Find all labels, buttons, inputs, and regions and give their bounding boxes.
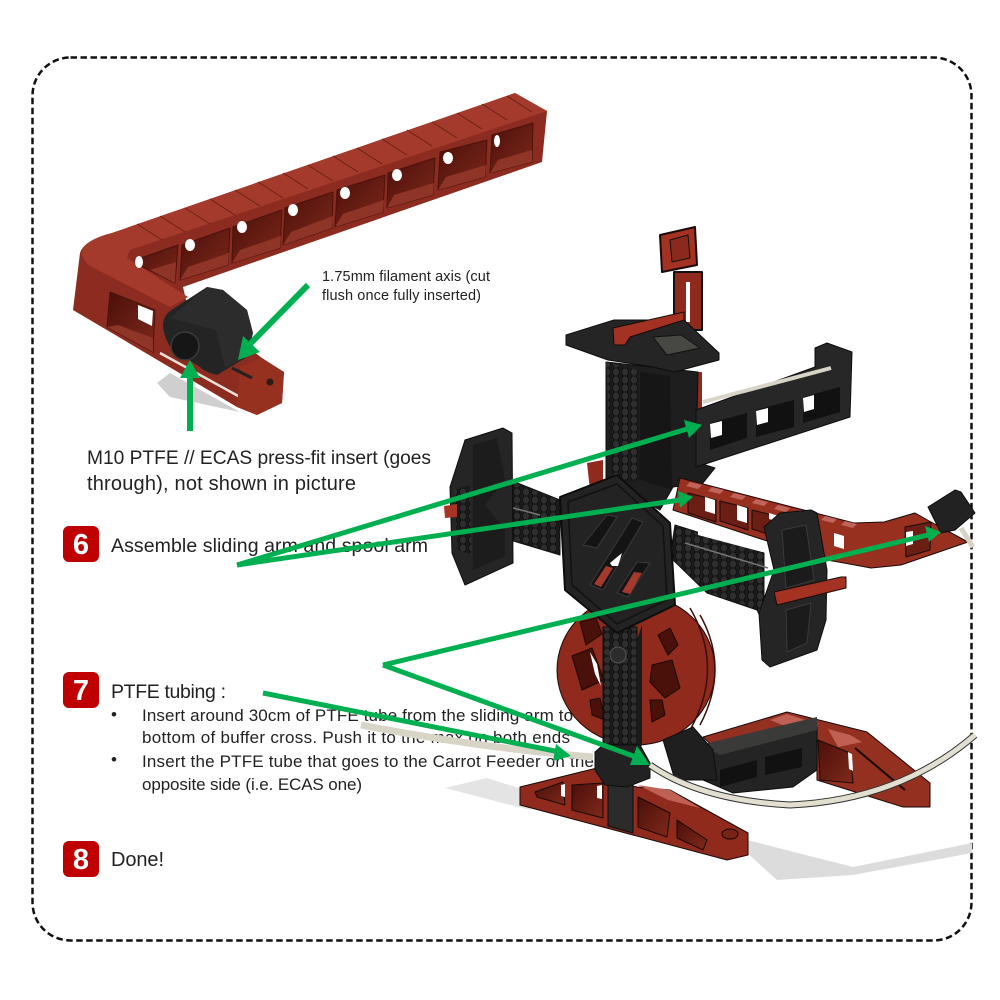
red sliding arm in machine — [673, 478, 968, 568]
upper right black arm — [696, 343, 852, 467]
arrow: spool arm — [237, 491, 693, 565]
ground shadow — [747, 840, 972, 880]
left black disc — [450, 428, 513, 585]
gap below red arm — [698, 527, 762, 552]
step 7 bullets: Insert around 30cm of PTFE tube from the sliding arm to the — [142, 706, 602, 725]
PTFE tube main curve — [650, 735, 975, 805]
insert label: M10 PTFE // ECAS press-fit insert (goes — [87, 448, 431, 469]
left red clip — [444, 504, 457, 518]
left spool arm — [510, 480, 560, 555]
right red clip — [774, 577, 846, 605]
rear strut — [663, 727, 717, 780]
arrow: insert — [180, 360, 200, 431]
step 7 bullets — [111, 705, 602, 794]
PTFE tube left section — [361, 725, 593, 757]
step 6 badge — [63, 526, 99, 562]
step 7 bullets: opposite side (i.e. ECAS one) — [142, 775, 362, 794]
window floors — [107, 150, 532, 352]
arrow: filament axis — [238, 285, 308, 360]
base foot — [520, 768, 748, 860]
filament axis label: flush once fully inserted) — [322, 288, 481, 304]
lower cross column — [603, 627, 637, 753]
right black disc — [759, 510, 827, 667]
step 7 bullets: • — [111, 750, 117, 769]
column base block — [595, 745, 650, 787]
cross top cap — [566, 320, 719, 372]
hexagon hub — [560, 475, 675, 633]
step 8 badge — [63, 841, 99, 877]
step 7 badge — [63, 672, 99, 708]
arrow: tube insertion — [263, 693, 571, 761]
left ground shadow — [445, 778, 530, 810]
arrow: tube at sliding arm end — [383, 526, 941, 665]
sliding arm render — [73, 93, 547, 415]
filament axis label: 1.75mm filament axis (cut — [322, 269, 490, 285]
ribs — [137, 96, 532, 240]
red cap clip — [613, 312, 684, 345]
filament axis label — [322, 269, 490, 304]
red stem and flag — [660, 227, 702, 412]
PTFE tube at nut — [961, 528, 973, 547]
arm body — [73, 93, 547, 415]
arm shadow — [157, 373, 240, 412]
step 6 badge: 6 — [73, 529, 89, 561]
rear red frame — [703, 712, 930, 807]
right insert nut — [928, 490, 975, 533]
step 6 text: Assemble sliding arm and spool arm — [111, 535, 428, 557]
arrow: sliding arm — [237, 420, 702, 565]
step 7 bullets: Insert the PTFE tube that goes to the Carrot Feeder on the — [142, 752, 594, 771]
arm windows — [107, 123, 533, 352]
black insert nut — [163, 287, 253, 375]
insert label — [87, 448, 431, 495]
step 8 text: Done! — [111, 849, 164, 871]
right spool arm — [670, 525, 764, 625]
red bit behind column — [587, 460, 603, 490]
step 7 heading: PTFE tubing : — [111, 681, 226, 703]
step 7 badge: 7 — [73, 675, 89, 707]
cylinder groove — [160, 353, 240, 397]
spool wheel — [557, 595, 715, 745]
arm top surface — [82, 93, 547, 307]
insert label: through), not shown in picture — [87, 473, 356, 495]
step 8 badge: 8 — [73, 844, 89, 876]
window notches — [135, 135, 500, 326]
rear black frame — [687, 727, 817, 793]
step 7 bullets: bottom of buffer cross. Push it to the max on both ends — [142, 728, 570, 747]
step 7 bullets: • — [111, 705, 117, 724]
arrow: tube at cross bottom — [383, 665, 650, 765]
buffer machine render — [361, 227, 975, 880]
upper cross column — [606, 362, 715, 510]
